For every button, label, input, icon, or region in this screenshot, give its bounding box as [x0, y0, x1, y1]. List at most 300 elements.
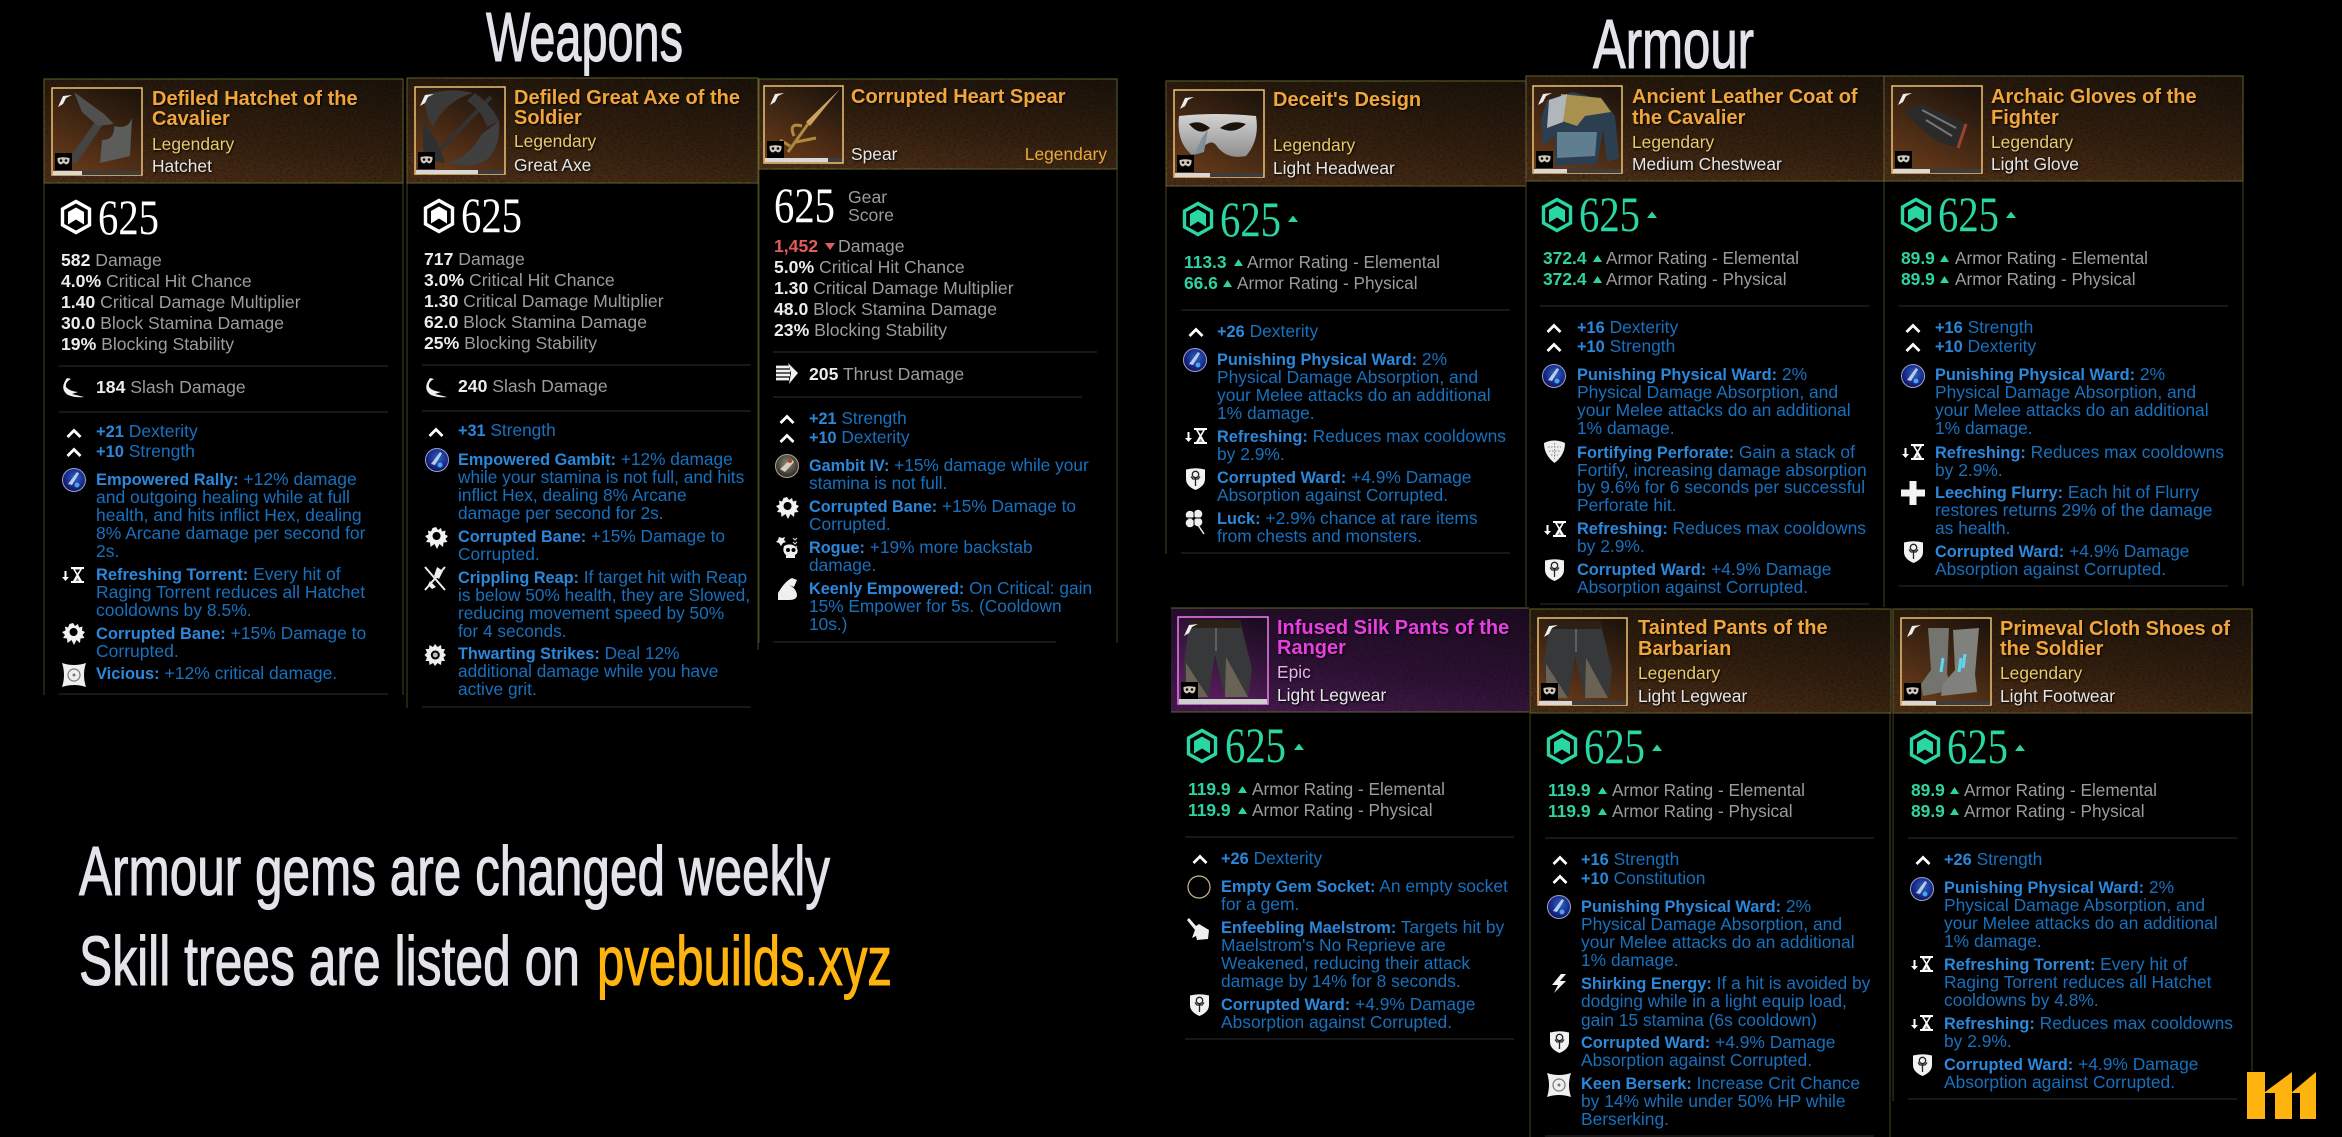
perks: Corrupted Ward: [1221, 996, 1350, 1014]
perks: Refreshing Torrent: [1944, 956, 2095, 974]
perks: 15% Empower for 5s. (Cooldown [809, 596, 1062, 616]
perks: Physical Damage Absorption, and [1577, 382, 1838, 402]
perks: Punishing Physical Ward: [1577, 366, 1777, 384]
armor ratings [1543, 248, 1799, 289]
attributes: Constitution [1609, 868, 1705, 888]
panel: Tainted Pants of the Barbarian [1530, 609, 1891, 1137]
gear score [1912, 718, 2025, 774]
perks: Refreshing: [1217, 428, 1308, 446]
item title: Defiled Hatchet of the [152, 88, 358, 110]
armor ratings: 89.9 [1901, 248, 1935, 268]
perks [424, 448, 750, 699]
item title: Deceit's Design [1273, 89, 1421, 111]
item title: Medium Chestwear [1632, 154, 1782, 174]
attributes [68, 421, 198, 461]
attributes: +10 [96, 443, 124, 461]
perks: gain 15 stamina (6s cooldown) [1581, 1010, 1817, 1030]
attributes: +10 [1581, 870, 1609, 888]
perks: 1% damage. [1577, 418, 1675, 438]
slash damage: 240 Slash Damage [458, 376, 608, 396]
armor ratings [1548, 780, 1805, 821]
weapon stats: 717 [424, 249, 454, 269]
perks [1547, 896, 1871, 1129]
armor ratings: Armor Rating - Physical [1964, 801, 2145, 821]
item title: Cavalier [152, 108, 230, 130]
gear score: 625 [774, 177, 835, 233]
perks: Physical Damage Absorption, and [1217, 367, 1478, 387]
armor ratings: Armor Rating - Physical [1612, 801, 1793, 821]
perks: Corrupted Ward: [1944, 1056, 2073, 1074]
perks: Reduces max cooldowns [2035, 1013, 2233, 1033]
attributes: +10 [1577, 338, 1605, 356]
perks: +4.9% Damage [2064, 541, 2189, 561]
perks: Crippling Reap: [458, 569, 579, 587]
weapon stats: 3.0% [424, 270, 464, 290]
perks [776, 454, 1092, 634]
weapon stats: 582 [61, 250, 91, 270]
attributes: Strength [1972, 849, 2042, 869]
thrust damage: 205 Thrust Damage [809, 364, 964, 384]
item icon: pants [1538, 618, 1627, 705]
perks: +15% Damage to [226, 623, 366, 643]
perks: Corrupted Ward: [1577, 561, 1706, 579]
perks: by 2.9%. [1935, 460, 2003, 480]
panel: Primeval Cloth Shoes of the Soldier [1893, 609, 2252, 1101]
perks: Every hit of [248, 564, 341, 584]
item title: Primeval Cloth Shoes of [2000, 618, 2230, 640]
item title: Legendary [1991, 132, 2073, 152]
attributes [780, 408, 910, 447]
perks: Physical Damage Absorption, and [1935, 382, 2196, 402]
perks: Gain a stack of [1734, 442, 1855, 462]
perks: If a hit is avoided by [1712, 973, 1871, 993]
weapon stats [774, 236, 1014, 340]
slash damage: 184 Slash Damage [96, 377, 246, 397]
perks: Each hit of Flurry [2063, 482, 2200, 502]
card header [1171, 608, 1529, 712]
attributes: Dexterity [124, 421, 198, 441]
perks: Thwarting Strikes: [458, 645, 600, 663]
attributes: +16 [1581, 851, 1609, 869]
attributes: Dexterity [1963, 336, 2036, 356]
perks: your Melee attacks do an additional [1944, 913, 2218, 933]
gear score: 625 [1947, 718, 2008, 774]
armor ratings [1911, 780, 2157, 821]
perks: Absorption against Corrupted. [1577, 577, 1808, 597]
perks: health, and hits inflict Hex, dealing [96, 505, 362, 525]
attributes: +16 [1935, 319, 1963, 337]
perks: Reduces max cooldowns [2026, 442, 2224, 462]
gear score [1902, 186, 2016, 242]
armor ratings: Armor Rating - Physical [1237, 273, 1418, 293]
gear score: 625 [1938, 186, 1999, 242]
logo [2247, 1072, 2316, 1119]
perks: +2.9% chance at rare items [1261, 508, 1478, 528]
heading: Weapons: Weapons [486, 0, 683, 76]
perks: Fortifying Perforate: [1577, 444, 1734, 462]
perks: Punishing Physical Ward: [1935, 366, 2135, 384]
perks: Leeching Flurry: [1935, 484, 2063, 502]
armor ratings: Armor Rating - Elemental [1247, 252, 1440, 272]
item title: Corrupted Heart Spear [851, 86, 1066, 108]
item title: Barbarian [1638, 638, 1731, 660]
item title: Light Glove [1991, 154, 2079, 174]
item icon: glove [1892, 86, 1982, 173]
perks [1542, 364, 1867, 597]
perks: 2% [1777, 364, 1807, 384]
perks: by 2.9%. [1944, 1031, 2012, 1051]
perks: +4.9% Damage [2073, 1054, 2198, 1074]
perks: +4.9% Damage [1350, 994, 1475, 1014]
weapon stats: Damage [453, 249, 525, 269]
perks: 10s.) [809, 614, 847, 634]
card header [759, 79, 1117, 169]
perks: Increase Crit Chance [1692, 1073, 1860, 1093]
panel: Infused Silk Pants of the Ranger [1171, 608, 1529, 1039]
weapon stats: Blocking Stability [809, 320, 947, 340]
perks: Corrupted. [96, 641, 179, 661]
weapon stats: Block Stamina Damage [95, 313, 284, 333]
perks: +19% more backstab [865, 537, 1033, 557]
perks: Fortify, increasing damage absorption [1577, 460, 1867, 480]
perks: An empty socket [1375, 876, 1508, 896]
perks: Keenly Empowered: [809, 580, 964, 598]
perks: by 14% while under 50% HP while [1581, 1091, 1846, 1111]
item title: Hatchet [152, 156, 212, 176]
item icon: mask [1174, 90, 1264, 177]
perks: damage by 14% for 8 seconds. [1221, 971, 1461, 991]
item title: Ranger [1277, 637, 1346, 659]
item title: Legendary [1632, 132, 1714, 152]
attributes: +26 [1221, 850, 1249, 868]
perks: Every hit of [2095, 954, 2187, 974]
armor ratings: 119.9 [1548, 780, 1591, 800]
perks: Corrupted Bane: [96, 625, 226, 643]
perks: 1% damage. [1935, 418, 2033, 438]
perks: Physical Damage Absorption, and [1581, 914, 1842, 934]
item title: Great Axe [514, 155, 591, 175]
perks: Empowered Rally: [96, 471, 238, 489]
panel: Deceit's Design [1166, 81, 1526, 554]
weapon stats: Blocking Stability [96, 334, 234, 354]
perks: Gambit IV: [809, 457, 889, 475]
item title: Legendary [1273, 135, 1355, 155]
perks: reducing movement speed by 50% [458, 603, 724, 623]
perks: Refreshing: [1935, 444, 2026, 462]
perks: Empowered Gambit: [458, 451, 616, 469]
perks: Absorption against Corrupted. [1581, 1050, 1812, 1070]
card header [44, 79, 403, 183]
item title: the Cavalier [1632, 107, 1746, 129]
attributes: +21 [809, 410, 837, 428]
perks: cooldowns by 4.8%. [1944, 990, 2099, 1010]
perks: Refreshing: [1577, 520, 1668, 538]
attributes: Strength [1609, 849, 1679, 869]
gear score: Gear [848, 187, 887, 207]
perks: by 2.9%. [1217, 444, 1285, 464]
weapon stats: Damage [838, 236, 905, 256]
item title: Tainted Pants of the [1638, 617, 1828, 639]
perks: Corrupted. [809, 514, 891, 534]
perks: restores returns 29% of the damage [1935, 500, 2212, 520]
perks: +15% Damage to [937, 496, 1076, 516]
perks: is below 50% health, they are Slowed, [458, 585, 750, 605]
armor ratings: 372.4 [1543, 248, 1587, 268]
perks: 2s. [96, 541, 119, 561]
perks: cooldowns by 8.5%. [96, 600, 252, 620]
weapon stats: 23% [774, 320, 810, 340]
armor ratings: 66.6 [1184, 273, 1218, 293]
perks: 2% [2144, 877, 2174, 897]
item title: Defiled Great Axe of the [514, 87, 740, 109]
weapon stats: Block Stamina Damage [808, 299, 997, 319]
panel: Defiled Great Axe of the Soldier [407, 78, 758, 708]
gear score [1184, 191, 1298, 247]
perks: by 2.9%. [1577, 536, 1645, 556]
weapon stats: 19% [61, 334, 97, 354]
perks: Targets hit by [1396, 917, 1505, 937]
attributes [1194, 848, 1322, 868]
perks: On Critical: gain [964, 578, 1092, 598]
attributes [1906, 317, 2036, 356]
perks [1901, 364, 2224, 579]
weapon stats: Critical Damage Multiplier [458, 291, 664, 311]
attributes: Dexterity [1249, 848, 1322, 868]
perks: stamina is not full. [809, 473, 947, 493]
perks: for 4 seconds. [458, 621, 567, 641]
perks: Punishing Physical Ward: [1217, 351, 1417, 369]
armor ratings: 113.3 [1184, 252, 1227, 272]
perks: as health. [1935, 518, 2010, 538]
armor ratings: 119.9 [1188, 779, 1231, 799]
perks: Rogue: [809, 539, 865, 557]
weapon stats: 1.30 [774, 278, 808, 298]
perks: Deal 12% [600, 643, 680, 663]
attributes: Dexterity [837, 427, 910, 447]
perks: Corrupted Ward: [1581, 1034, 1710, 1052]
item title: Light Legwear [1638, 686, 1747, 706]
perks: 1% damage. [1581, 950, 1679, 970]
card header [1893, 609, 2252, 713]
weapon stats: Critical Hit Chance [814, 257, 965, 277]
attributes: +21 [96, 423, 124, 441]
armor ratings [1901, 248, 2148, 289]
perks: Maelstrom's No Reprieve are [1221, 935, 1446, 955]
gear score [1544, 186, 1657, 242]
item icon: pants [1178, 617, 1268, 704]
perks: Punishing Physical Ward: [1581, 898, 1781, 916]
attributes: +10 [809, 429, 837, 447]
rarity: Legendary [1025, 144, 1107, 164]
perks: Empty Gem Socket: [1221, 878, 1375, 896]
attributes: +31 [458, 422, 486, 440]
perks: Physical Damage Absorption, and [1944, 895, 2205, 915]
perks: Absorption against Corrupted. [1944, 1072, 2175, 1092]
perks: for a gem. [1221, 894, 1299, 914]
perks [1184, 348, 1506, 546]
attributes: Strength [1963, 317, 2033, 337]
perks: by 9.6% for 6 seconds per successful [1577, 477, 1865, 497]
perks: +4.9% Damage [1706, 559, 1831, 579]
armor ratings: Armor Rating - Elemental [1606, 248, 1799, 268]
gear score [774, 177, 894, 233]
item title: Light Headwear [1273, 158, 1395, 178]
card header [1884, 76, 2243, 181]
weapon stats: 62.0 [424, 312, 458, 332]
gear score: Score [848, 205, 894, 225]
perks: Vicious: [96, 665, 160, 683]
armor ratings: Armor Rating - Elemental [1955, 248, 2148, 268]
attributes: +10 [1935, 338, 1963, 356]
icon: thrust damage [776, 363, 798, 384]
armor ratings: Armor Rating - Physical [1252, 800, 1433, 820]
armor ratings: 89.9 [1901, 269, 1935, 289]
perks: Corrupted Bane: [809, 498, 937, 516]
gear score: 625 [1220, 191, 1281, 247]
item icon: spear [764, 86, 843, 163]
perks: Corrupted Ward: [1935, 543, 2064, 561]
perks: Absorption against Corrupted. [1217, 485, 1448, 505]
item title: Legendary [152, 134, 234, 154]
item icon: great axe [415, 87, 505, 174]
armor ratings: Armor Rating - Physical [1606, 269, 1787, 289]
weapon stats: 4.0% [61, 271, 101, 291]
note: skill trees: Skill trees are listed on [79, 922, 580, 1000]
perks: 2% [1417, 349, 1447, 369]
weapon stats: Blocking Stability [459, 333, 597, 353]
armor ratings: 372.4 [1543, 269, 1587, 289]
perks: Refreshing Torrent: [96, 566, 248, 584]
card header [1530, 609, 1891, 713]
card header [1166, 81, 1526, 186]
perks: your Melee attacks do an additional [1217, 385, 1491, 405]
item title: Spear [851, 144, 898, 164]
item title: Archaic Gloves of the [1991, 86, 2197, 108]
perks: Shirking Energy: [1581, 975, 1712, 993]
weapon stats: Damage [90, 250, 162, 270]
perks: 2% [2135, 364, 2165, 384]
armor ratings: Armor Rating - Elemental [1964, 780, 2157, 800]
armor ratings: Armor Rating - Elemental [1252, 779, 1445, 799]
gear score: 625 [1225, 717, 1286, 773]
card header [1526, 76, 1884, 181]
perks: Raging Torrent reduces all Hatchet [96, 582, 365, 602]
armor ratings: Armor Rating - Elemental [1612, 780, 1805, 800]
perks: additional damage while you have [458, 661, 718, 681]
perks: Corrupted. [458, 544, 540, 564]
perks: Perforate hit. [1577, 495, 1677, 515]
attributes [430, 420, 556, 440]
perks: Berserking. [1581, 1109, 1669, 1129]
weapon stats: Block Stamina Damage [458, 312, 647, 332]
gear score [426, 187, 522, 243]
weapon stats: 1.30 [424, 291, 458, 311]
card header [407, 78, 758, 183]
perks: active grit. [458, 679, 537, 699]
attributes: +26 [1217, 323, 1245, 341]
perks: +4.9% Damage [1346, 467, 1471, 487]
perks: Enfeebling Maelstrom: [1221, 919, 1396, 937]
perks: damage. [809, 555, 876, 575]
perks: Weakened, reducing their attack [1221, 953, 1470, 973]
item title: Infused Silk Pants of the [1277, 617, 1509, 639]
perks [1910, 877, 2233, 1092]
item title: Legendary [2000, 663, 2082, 683]
perks: 1% damage. [1217, 403, 1315, 423]
perks: from chests and monsters. [1217, 526, 1422, 546]
item title: Fighter [1991, 107, 2059, 129]
item title: the Soldier [2000, 638, 2104, 660]
perks: Luck: [1217, 510, 1261, 528]
perks: 1% damage. [1944, 931, 2042, 951]
weapon stats: Critical Hit Chance [464, 270, 615, 290]
panel: Ancient Leather Coat of the Cavalier [1526, 76, 1884, 607]
perks: while your stamina is not full, and hits [457, 467, 745, 487]
weapon stats: 30.0 [61, 313, 95, 333]
perks: Absorption against Corrupted. [1221, 1012, 1452, 1032]
perks: +12% damage [238, 469, 357, 489]
gear score: 625 [1579, 186, 1640, 242]
heading: Armour: Armour [1593, 5, 1754, 83]
attributes [1916, 849, 2042, 869]
icon: slash damage [63, 378, 84, 397]
weapon stats: 25% [424, 333, 460, 353]
gear score: 625 [461, 187, 522, 243]
attributes: Strength [837, 408, 907, 428]
note: site link: pvebuilds.xyz [597, 922, 892, 1000]
item title: Legendary [514, 131, 596, 151]
weapon stats: 1,452 [774, 236, 818, 256]
attributes [1190, 321, 1318, 341]
item title: Soldier [514, 107, 582, 129]
gear score: 625 [1584, 718, 1645, 774]
perks: Keen Berserk: [1581, 1075, 1692, 1093]
perks [62, 468, 366, 687]
gear score [62, 189, 159, 245]
item icon: chest armour [1533, 86, 1622, 173]
item icon: boots [1901, 618, 1991, 705]
perks: Reduces max cooldowns [1668, 518, 1866, 538]
perks: +12% damage [616, 449, 733, 469]
perks: Reduces max cooldowns [1308, 426, 1506, 446]
panel: Defiled Hatchet of the Cavalier [44, 79, 403, 695]
item title: Epic [1277, 662, 1311, 682]
attributes: Strength [486, 420, 556, 440]
item title: Legendary [1638, 663, 1720, 683]
weapon stats: Critical Damage Multiplier [808, 278, 1014, 298]
perks: damage per second for 2s. [458, 503, 664, 523]
item icon: hatchet [52, 88, 142, 175]
armor ratings: 119.9 [1188, 800, 1231, 820]
perks: and outgoing healing while at full [96, 487, 350, 507]
attributes: +26 [1944, 851, 1972, 869]
perks: +12% critical damage. [160, 663, 337, 683]
armor ratings [1188, 779, 1445, 820]
note: armour gems: Armour gems are changed weekly [79, 832, 830, 910]
armor ratings: 119.9 [1548, 801, 1591, 821]
armor ratings: 89.9 [1911, 801, 1945, 821]
perks: Corrupted Bane: [458, 528, 586, 546]
perks: Absorption against Corrupted. [1935, 559, 2166, 579]
attributes: Dexterity [1245, 321, 1318, 341]
gear score [1188, 717, 1304, 773]
perks: your Melee attacks do an additional [1935, 400, 2209, 420]
item title: Ancient Leather Coat of [1632, 86, 1858, 108]
armor ratings: 89.9 [1911, 780, 1945, 800]
weapon stats: Critical Damage Multiplier [95, 292, 301, 312]
perks: inflict Hex, dealing 8% Arcane [458, 485, 687, 505]
attributes: Strength [124, 441, 195, 461]
